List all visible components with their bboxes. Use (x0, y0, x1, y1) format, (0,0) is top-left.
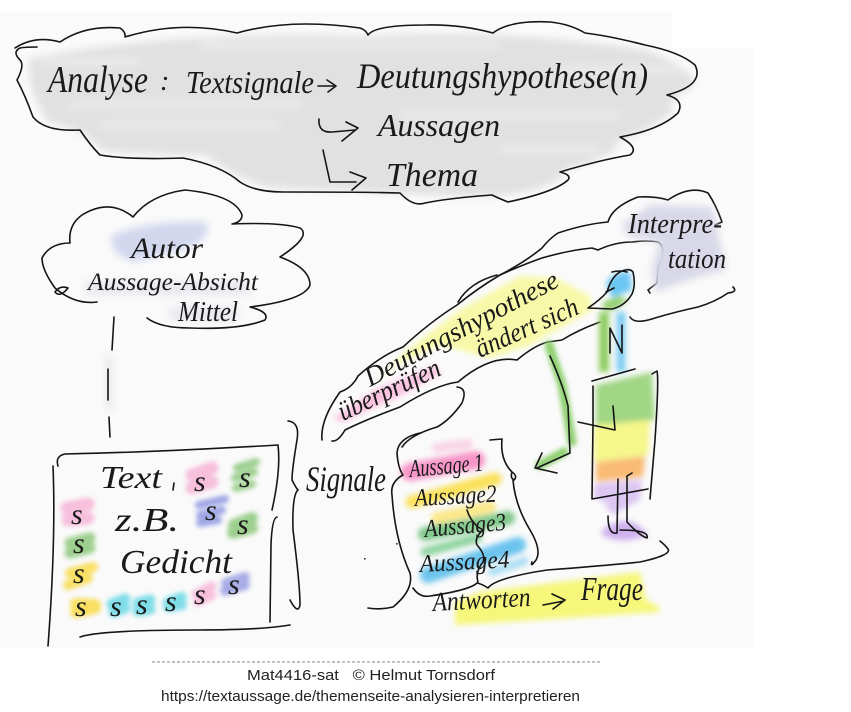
label: Mittel: Mittel (177, 297, 238, 328)
signal letters: s (228, 568, 240, 601)
label: z.B.: z.B. (114, 502, 179, 539)
head (588, 270, 634, 309)
panel: analysis cloud (15, 22, 697, 204)
label: Aussage4: Aussage4 (417, 546, 510, 578)
neck (610, 325, 622, 353)
arrow line (535, 356, 570, 473)
heading: Analyse: Analyse (46, 59, 148, 101)
label: Deutungshypothese(n): Deutungshypothese(n) (356, 56, 648, 96)
footer url: https://textaussage.de/themenseite-analysieren-interpretieren (161, 688, 580, 705)
interpretation shading (622, 205, 726, 292)
tail to Aussagen (402, 387, 464, 447)
panel: person figure (578, 270, 658, 540)
label: Textsignale: Textsignale (186, 64, 314, 100)
cloud loop (55, 287, 68, 294)
signal marks (67, 462, 256, 612)
cloud shading (29, 34, 693, 196)
body (592, 369, 658, 499)
signal letters: s (136, 588, 148, 621)
label: Frage: Frage (580, 571, 643, 608)
signal letters: s (73, 527, 85, 560)
signal letters: s (110, 590, 122, 623)
label: überprüfen: überprüfen (333, 353, 446, 427)
signal letters: s (165, 585, 177, 618)
label: Thema: Thema (386, 157, 478, 194)
box outline (48, 445, 290, 646)
inner cloud outline (322, 241, 663, 440)
label: Text: Text (100, 459, 163, 495)
label: Aussage 1: Aussage 1 (407, 450, 484, 483)
arrow: to Thema (323, 150, 366, 190)
label: Deutungshypothese: Deutungshypothese (358, 264, 564, 393)
label: tation: tation (668, 244, 726, 275)
arrow: to hypotheses (318, 80, 336, 92)
label: ändert sich: ändert sich (470, 291, 583, 363)
signal letters (71, 461, 251, 623)
dashed connector author to text (108, 317, 114, 437)
footer credit: Mat4416-sat © Helmut Tornsdorf (247, 667, 496, 684)
arrow: to Frage (543, 594, 565, 609)
footer divider (152, 661, 602, 663)
label: Aussage2: Aussage2 (412, 481, 497, 512)
label: Gedicht: Gedicht (120, 544, 234, 581)
cloud outline (15, 22, 697, 204)
signal letters: s (194, 578, 206, 611)
yellow highlight (455, 572, 660, 625)
Aussage colour bands (410, 444, 525, 575)
arrow colour (540, 345, 572, 465)
sketch background (0, 12, 754, 648)
colon: : (160, 66, 169, 97)
descender squiggle (467, 510, 484, 582)
thought cloud colour (333, 276, 592, 422)
label: Aussagen: Aussagen (376, 107, 500, 143)
label: Interpre-: Interpre- (627, 209, 722, 240)
panel: hypothesis thought cloud (322, 190, 735, 447)
panel: text box with signals (48, 445, 290, 646)
arrow: thought to Aussagen (535, 345, 572, 473)
arm (578, 406, 615, 430)
signal letters: s (237, 508, 249, 541)
legs and feet (608, 473, 647, 538)
label: Signale: Signale (306, 459, 386, 499)
label: Autor: Autor (129, 232, 203, 265)
label: Aussage3: Aussage3 (421, 509, 507, 543)
signal letters: s (239, 461, 251, 494)
author shading (85, 222, 250, 410)
panel: answers to question (413, 541, 668, 625)
right brace (490, 439, 538, 565)
lower cloud outline (332, 322, 600, 441)
bottom brace (413, 541, 668, 596)
left brace (368, 433, 420, 609)
small specks (364, 543, 398, 560)
figure colours (594, 272, 655, 540)
panel: list of Aussagen (368, 433, 538, 609)
author cloud outline (42, 190, 310, 328)
comma (173, 483, 174, 490)
arrow: to Aussagen (319, 119, 358, 141)
big brace (288, 421, 300, 609)
panel: author cloud (42, 190, 310, 410)
signal letters: s (205, 494, 217, 527)
signal letters: s (75, 590, 87, 623)
signal letters: s (71, 498, 83, 531)
signal letters: s (73, 557, 85, 590)
signal letters: s (194, 465, 206, 498)
label: Antworten: Antworten (430, 582, 531, 617)
right bubble tail (630, 287, 735, 321)
panel: interpretation label (622, 205, 726, 292)
label: Aussage-Absicht: Aussage-Absicht (86, 269, 259, 296)
upper bubble outline (458, 190, 722, 302)
